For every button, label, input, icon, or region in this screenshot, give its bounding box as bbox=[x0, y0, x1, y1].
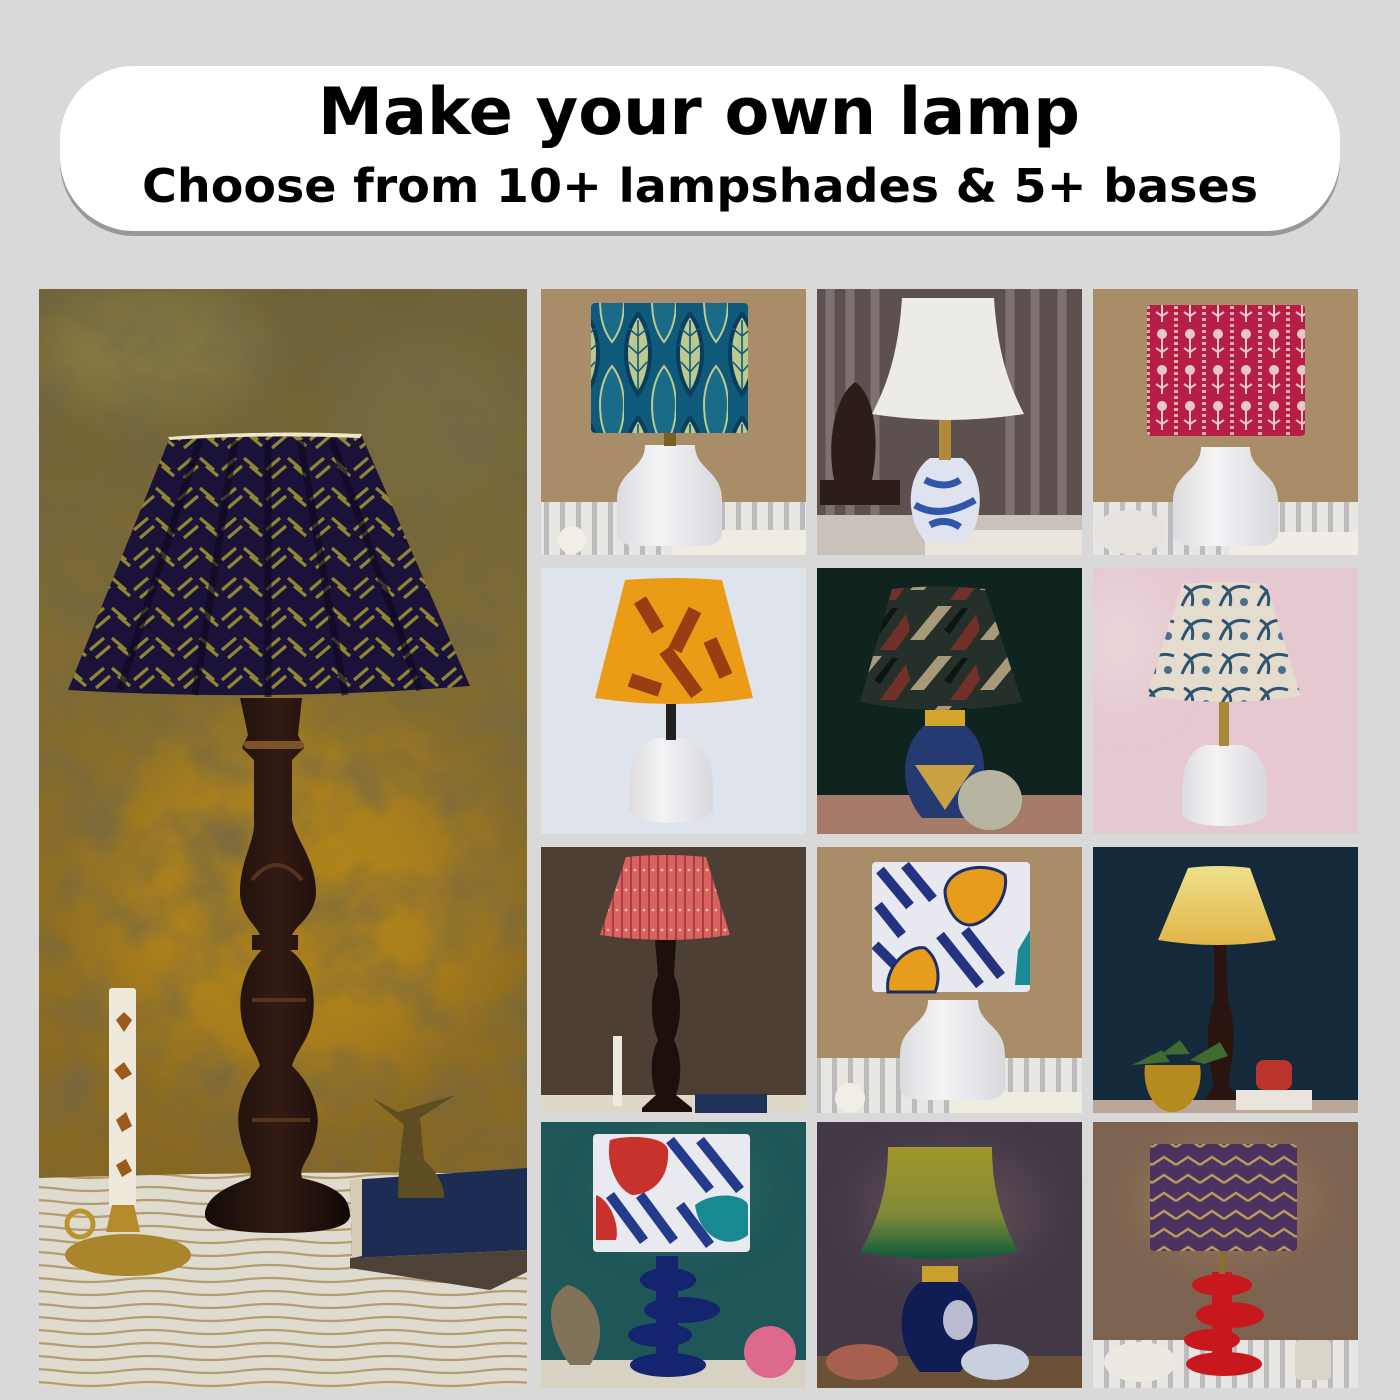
panel: dark green pleated lamp bbox=[817, 568, 1082, 834]
base bbox=[900, 1000, 1005, 1100]
cup and books bbox=[1236, 1060, 1312, 1110]
base bbox=[911, 458, 980, 542]
shade bbox=[1158, 866, 1276, 945]
shade bbox=[595, 578, 753, 704]
base bbox=[629, 738, 713, 823]
pink flowers bbox=[744, 1326, 796, 1378]
books and brass deer bbox=[350, 1095, 527, 1290]
peacock figurine bbox=[551, 1285, 600, 1365]
shade bbox=[860, 586, 1022, 710]
shade bbox=[591, 303, 748, 433]
stacked blue base bbox=[628, 1256, 720, 1377]
shade bbox=[1147, 305, 1305, 436]
lamp pedestal bbox=[205, 698, 350, 1233]
base bbox=[1173, 447, 1278, 546]
shade bbox=[593, 1134, 750, 1252]
base bbox=[617, 445, 722, 546]
plant in gold pot bbox=[1132, 1040, 1228, 1112]
base bbox=[905, 725, 984, 818]
pedestal bbox=[642, 940, 692, 1112]
subheading: Choose from 10+ lampshades & 5+ bases bbox=[142, 159, 1258, 213]
panel: green bell shade lamp bbox=[817, 1122, 1082, 1388]
stacked red base bbox=[1184, 1272, 1264, 1376]
shade bbox=[1150, 1144, 1297, 1251]
lampshade bbox=[68, 433, 470, 697]
shade bbox=[600, 855, 730, 940]
panel: cream floral shade lamp bbox=[1080, 568, 1358, 834]
mask bbox=[958, 770, 1022, 830]
teapot and candle bbox=[1104, 1340, 1331, 1382]
shade bbox=[872, 298, 1024, 420]
pedestal bbox=[1204, 945, 1236, 1100]
base bbox=[1182, 745, 1267, 826]
panel: white bell shade lamp bbox=[817, 289, 1082, 555]
woven table surface bbox=[39, 1173, 527, 1388]
panel: batik drum on blue stacked base bbox=[541, 1122, 806, 1388]
panel: yellow glowing shade lamp on navy bbox=[1093, 847, 1358, 1113]
shade bbox=[872, 862, 1030, 992]
candle and brass holder bbox=[65, 988, 191, 1276]
panel: red floral drum lamp bbox=[1093, 289, 1358, 555]
shade bbox=[1147, 582, 1301, 702]
panel: purple drum on red stacked base bbox=[1093, 1122, 1358, 1388]
flowers and teacup bbox=[826, 1344, 1029, 1380]
panel: main lamp photo bbox=[39, 289, 527, 1388]
shade bbox=[860, 1147, 1018, 1259]
title banner bbox=[60, 66, 1340, 236]
heading: Make your own lamp bbox=[318, 75, 1080, 150]
panel: teal leaf drum lamp bbox=[541, 289, 806, 555]
panel: blue and white leaf drum lamp bbox=[817, 847, 1082, 1113]
panel: orange cone shade lamp bbox=[541, 568, 806, 834]
panel: pink pleated shade on dark pedestal bbox=[541, 847, 806, 1113]
vase bbox=[902, 1282, 978, 1372]
